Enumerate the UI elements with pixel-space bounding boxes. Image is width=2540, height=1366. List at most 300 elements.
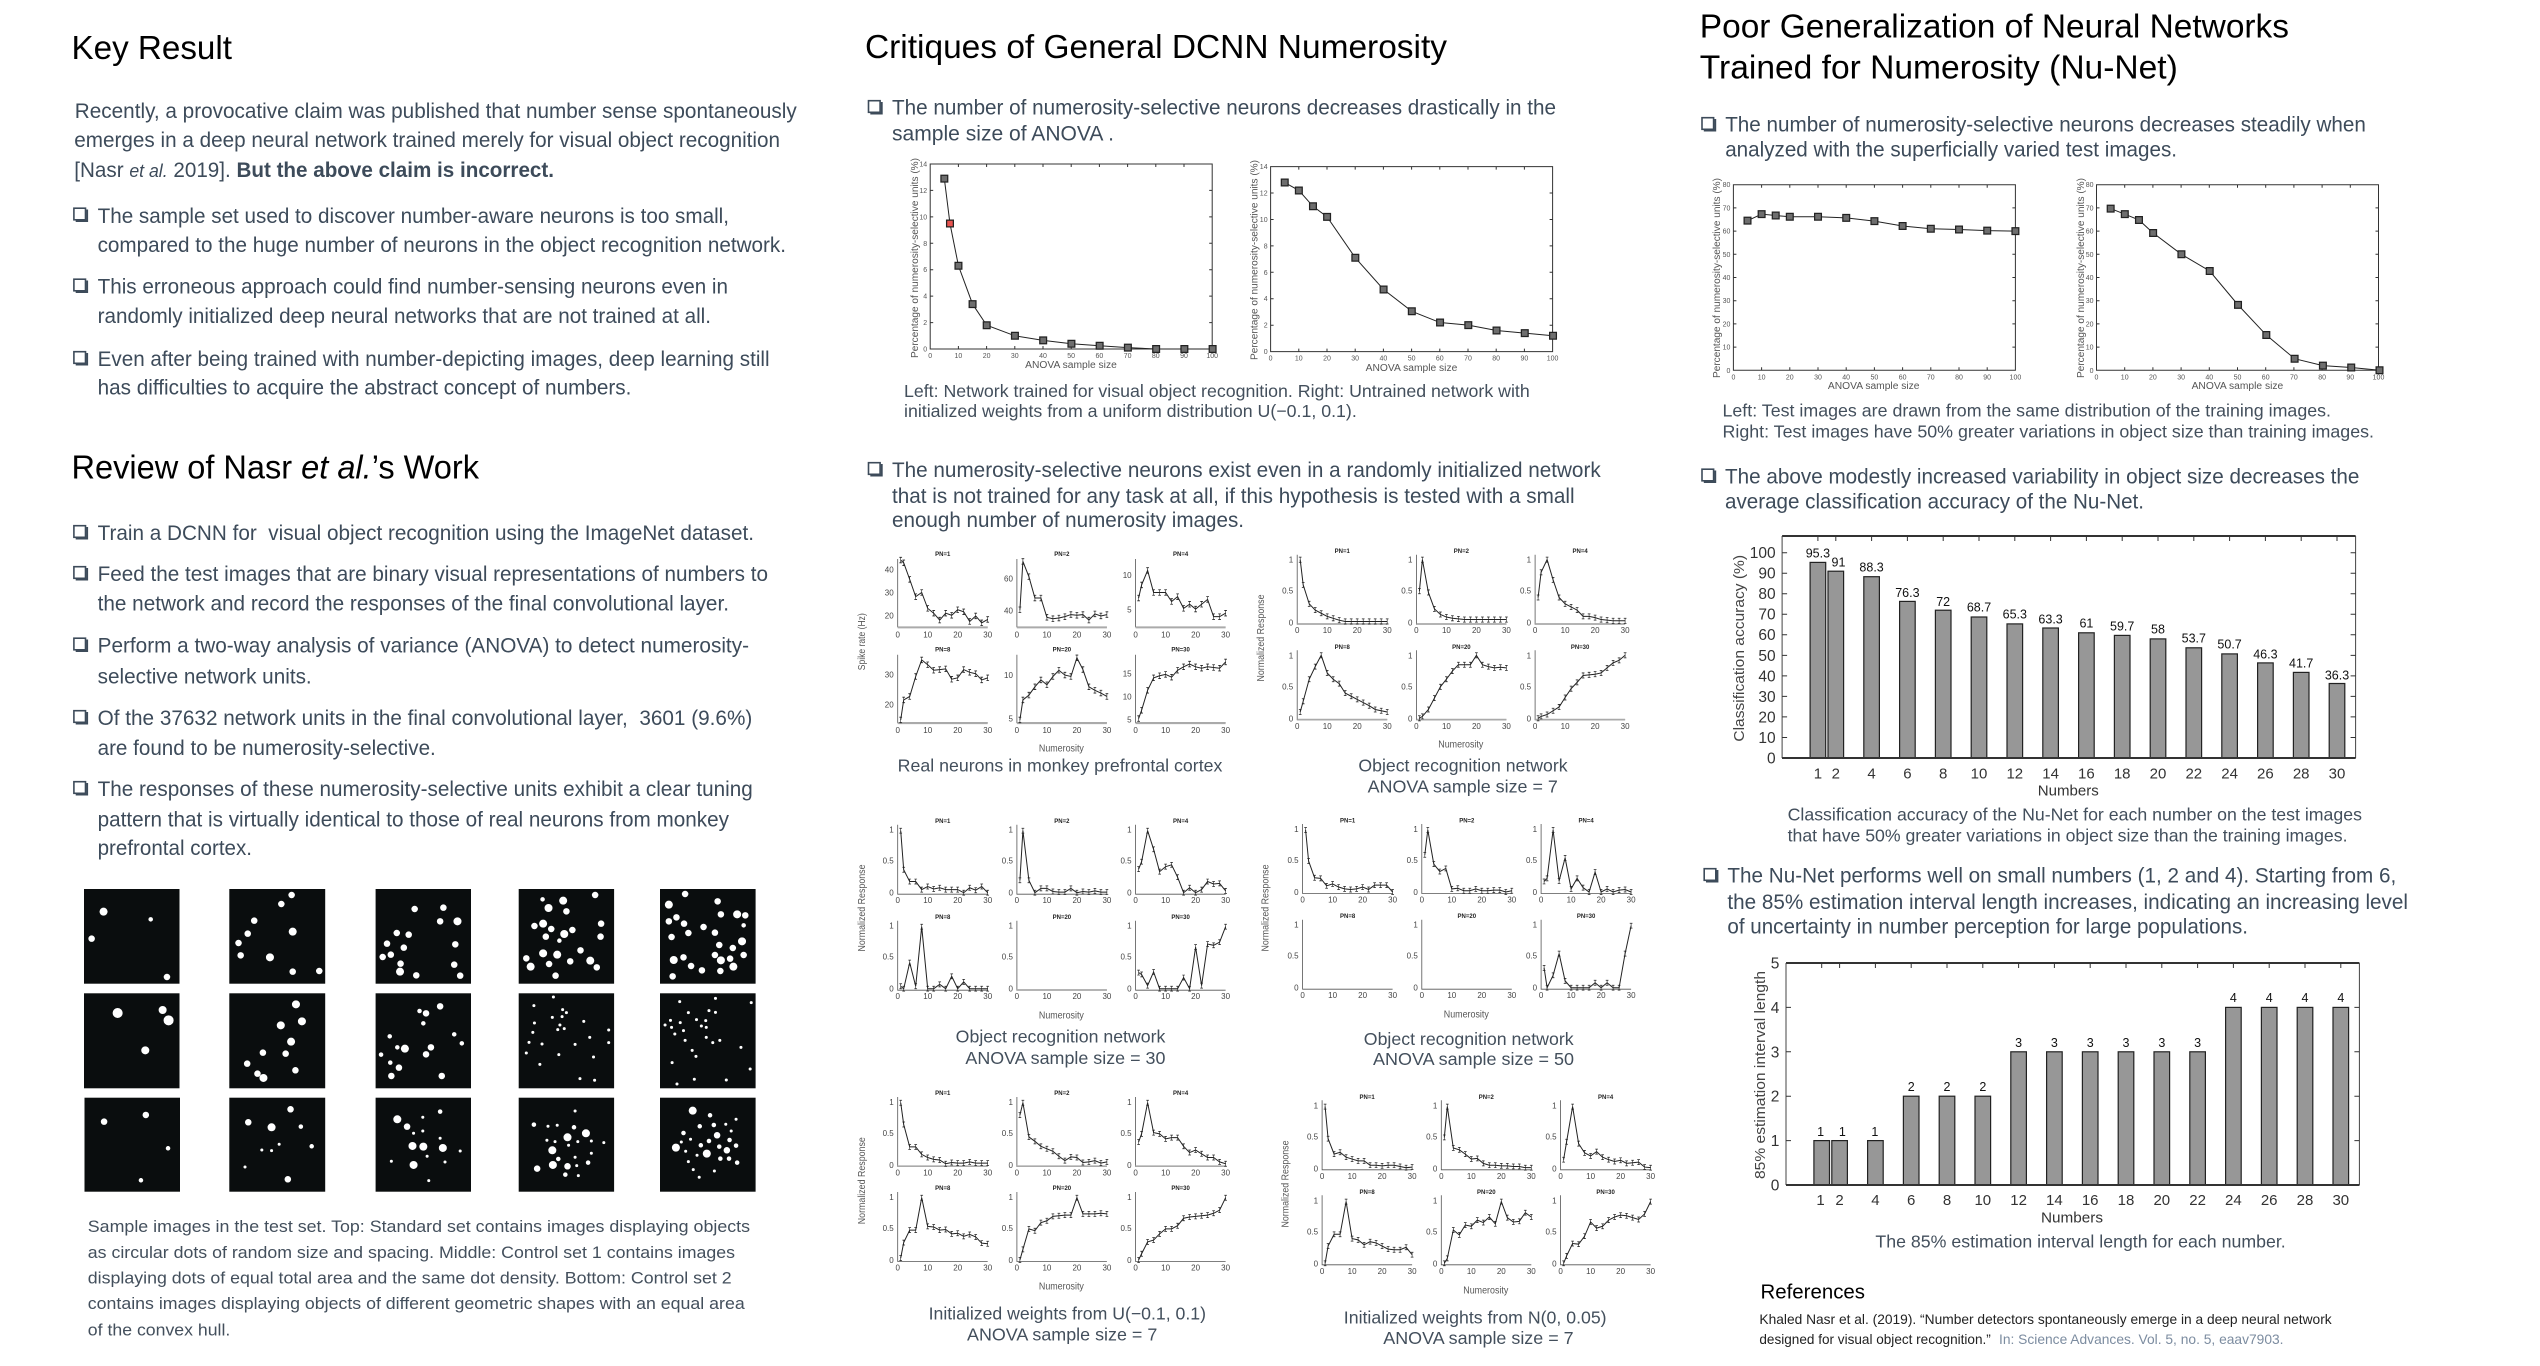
bar chart: 85% estimation interval length: 3 <box>2123 1036 2130 1050</box>
mini chart: PN=8 <box>1287 914 1398 1000</box>
bullet: network unit counts: Of the 37632 network units in the final convolutional layer, 3601 (9.6%) <box>98 707 752 730</box>
caption: Initialized weights from U(−0.1, 0.1) <box>929 1303 1206 1323</box>
mini chart: PN=30: PN=30 <box>1171 1186 1191 1192</box>
mini chart: PN=1 <box>1282 549 1392 635</box>
mini chart: PN=1 <box>885 552 993 640</box>
small multiples: initialized weights uniform <box>857 1091 1231 1344</box>
mini chart: PN=8: PN=8 <box>1340 914 1356 920</box>
mini chart: PN=4 <box>1123 552 1231 640</box>
dot image: control set 1, 3 <box>376 993 471 1088</box>
bar chart: 85% estimation interval length: 4 <box>2302 991 2309 1005</box>
small multiples: object recognition network, ANOVA 7 <box>1256 549 1630 796</box>
bar chart: classification accuracy: 8 <box>1939 765 1947 782</box>
bar chart: classification accuracy: 30 <box>2329 765 2345 782</box>
bullet: variability decreases accuracy: average classification accuracy of the Nu-Net. <box>1725 491 2144 514</box>
mini chart: PN=4: 5 <box>1127 605 1132 614</box>
y axis label: Spike rate (Hz) <box>857 613 868 670</box>
bar chart: 85% estimation interval length: 24 <box>2225 1192 2242 1209</box>
bar chart: classification accuracy: 76.3 <box>1895 586 1920 600</box>
bar chart: classification accuracy: 10 <box>1971 765 1987 782</box>
bar chart: 85% estimation interval length: 2 <box>1944 1080 1951 1094</box>
caption: sample images: displaying dots of equal total area and the same dot density. Bottom: Control set 2 <box>88 1269 732 1288</box>
mini chart: PN=20: PN=20 <box>1452 645 1471 651</box>
caption: ANOVA sample size = 50 <box>1373 1049 1574 1069</box>
bar chart: classification accuracy: 90 <box>1758 566 1776 583</box>
mini chart: PN=4: PN=4 <box>1173 552 1189 558</box>
bullet: neurons decrease with sample size <box>868 97 1556 146</box>
caption: classification accuracy <box>1788 805 2362 846</box>
bar chart: classification accuracy: 26 <box>2257 765 2274 782</box>
dot image: control set 2, 1 <box>84 1098 180 1192</box>
dot image: control set 1, 2 <box>229 993 325 1088</box>
bar chart: 85% estimation interval length: 3 <box>2158 1036 2165 1050</box>
bar chart: 85% estimation interval length: 8 <box>1943 1192 1951 1209</box>
dot image: control set 1, 1 <box>84 993 180 1088</box>
x axis label: Numerosity <box>1039 744 1084 754</box>
caption: Object recognition network <box>1364 1029 1574 1049</box>
bar chart: classification accuracy: 68.7 <box>1967 601 1991 615</box>
heading: Critiques of General DCNN Numerosity: Critiques of General DCNN Numerosity <box>865 28 1447 65</box>
caption: Object recognition network <box>956 1026 1166 1046</box>
bar chart: classification accuracy <box>1731 536 2356 800</box>
bar chart: classification accuracy: 36.3 <box>2325 668 2349 682</box>
mini chart: PN=2 <box>1004 552 1112 640</box>
mini chart: PN=8 <box>1282 645 1392 731</box>
bar chart: 85% estimation interval length: 1 <box>1871 1125 1878 1139</box>
y axis label: Normalized Response <box>857 864 868 952</box>
bullet: feed test images <box>74 563 768 616</box>
bar chart: classification accuracy: Classification accuracy (%) <box>1731 555 1748 742</box>
mini chart: PN=2: PN=2 <box>1054 552 1070 558</box>
bar chart: classification accuracy: 50 <box>1758 648 1776 665</box>
bar chart: classification accuracy: 72 <box>1936 595 1950 609</box>
bullet: network unit counts <box>74 707 752 760</box>
bar chart: classification accuracy: 41.7 <box>2289 657 2313 671</box>
bullet: difficulties acquiring concept <box>74 348 770 400</box>
bar chart: classification accuracy: 80 <box>1758 586 1776 603</box>
caption <box>1344 1307 1607 1348</box>
caption: Object recognition network <box>1358 756 1568 776</box>
bar chart: 85% estimation interval length: 1 <box>1771 1133 1779 1150</box>
bar chart: 85% estimation interval length: 85% estimation interval length <box>1752 971 1769 1179</box>
mini chart: PN=2: 60 <box>1004 574 1013 583</box>
caption: sample images <box>88 1217 750 1340</box>
line chart: varied test images: ANOVA sample size <box>2192 381 2284 392</box>
dot image: control set 2, 5 <box>660 1098 756 1192</box>
bar chart: 85% estimation interval length: 4 <box>2337 991 2344 1005</box>
mini chart: PN=1: 30 <box>885 588 894 597</box>
bar chart: classification accuracy: 16 <box>2078 765 2095 782</box>
bar chart: classification accuracy: 40 <box>1758 668 1776 685</box>
bullet: small numbers and interval length: The Nu-Net performs well on small numbers (1, 2 and 4). Starting from 6, <box>1727 865 2396 888</box>
mini chart: PN=4 <box>1120 819 1231 905</box>
mini chart: PN=20: 10 <box>1004 671 1013 680</box>
mini chart: PN=20: PN=20 <box>1053 648 1072 654</box>
y axis label: Normalized Response <box>1256 594 1267 682</box>
mini chart: PN=1 <box>883 1091 993 1178</box>
caption: Initialized weights from N(0, 0.05) <box>1344 1307 1607 1327</box>
line chart: trained network: Percentage of numerosity-selective units (%) <box>910 158 921 358</box>
bar chart: 85% estimation interval length: 3 <box>2015 1036 2022 1050</box>
caption: ANOVA sample size = 7 <box>1368 776 1558 796</box>
bar chart: 85% estimation interval length: 2 <box>1979 1080 1986 1094</box>
bar chart: classification accuracy: 95.3 <box>1806 547 1830 561</box>
mini chart: PN=8: PN=8 <box>935 915 951 921</box>
caption: left/right networks: Left: Network trained for visual object recognition. Right: Untrained network with <box>904 381 1530 401</box>
y axis label: Normalized Response <box>1260 864 1272 952</box>
bullet: small numbers and interval length: of uncertainty in number perception for large populations. <box>1727 915 2248 938</box>
bar chart: classification accuracy: 20 <box>1758 709 1776 726</box>
small multiples: real neurons in monkey prefrontal cortex <box>857 552 1231 776</box>
caption <box>1358 756 1568 796</box>
bullet: ANOVA <box>74 635 749 688</box>
line chart: varied test images: Percentage of numerosity-selective units (%) <box>2076 178 2087 378</box>
mini chart: PN=4: 10 <box>1123 571 1132 580</box>
mini chart: PN=8: 20 <box>885 701 894 710</box>
line chart: varied test images <box>2076 178 2384 392</box>
heading: Poor Generalization: Trained for Numerosity (Nu-Net) <box>1700 48 2178 85</box>
mini chart: PN=2 <box>1002 819 1112 905</box>
mini chart: PN=1 <box>1307 1095 1417 1181</box>
bullet: neurons decrease steadily: The number of numerosity-selective neurons decreases steadily when <box>1725 114 2366 137</box>
dot image: standard set 4 <box>519 889 614 984</box>
dot image: control set 2, 2 <box>229 1098 325 1192</box>
caption: test image distribution: Left: Test images are drawn from the same distribution of the training images. <box>1722 401 2331 421</box>
line chart: untrained network: Percentage of numerosity-selective units (%) <box>1250 160 1261 360</box>
mini chart: PN=4: PN=4 <box>1579 818 1594 824</box>
bar chart: 85% estimation interval length: 4 <box>1871 1192 1880 1209</box>
mini chart: PN=30: PN=30 <box>1171 648 1191 654</box>
caption: ANOVA sample size = 7 <box>967 1324 1157 1344</box>
mini chart: PN=2: PN=2 <box>1054 1091 1070 1097</box>
mini chart: PN=4: PN=4 <box>1173 819 1189 825</box>
dot image: standard set 1 <box>84 889 180 984</box>
bar chart: 85% estimation interval length: 1 <box>1817 1125 1824 1139</box>
mini chart: PN=4: PN=4 <box>1573 549 1588 555</box>
bullet: selective neurons exist in random network <box>868 459 1601 532</box>
dot image: standard set 3 <box>376 889 471 984</box>
dot image: standard set 2 <box>229 889 325 984</box>
bar chart: classification accuracy: 18 <box>2114 765 2131 782</box>
mini chart: PN=20: PN=20 <box>1053 1186 1072 1192</box>
bullet: difficulties acquiring concept: has difficulties to acquire the abstract concept of numbers. <box>98 376 631 400</box>
bullet: small numbers and interval length <box>1704 865 2408 938</box>
mini chart: PN=2: PN=2 <box>1054 819 1070 825</box>
x axis label: Numerosity <box>1039 1010 1084 1022</box>
mini chart: PN=30: 5 <box>1127 716 1132 725</box>
line chart: untrained network: ANOVA sample size <box>1366 363 1458 374</box>
mini chart: PN=1: PN=1 <box>935 552 951 558</box>
mini chart: PN=2: PN=2 <box>1454 549 1470 555</box>
caption <box>956 1026 1166 1068</box>
mini chart: PN=2: PN=2 <box>1459 818 1475 824</box>
small multiples: initialized weights normal <box>1280 1095 1656 1348</box>
heading: Poor Generalization <box>1700 7 2289 85</box>
bar chart: 85% estimation interval length: 3 <box>2194 1036 2201 1050</box>
bullet: ANOVA: selective network units. <box>98 666 312 688</box>
bar chart: classification accuracy: 58 <box>2151 623 2165 637</box>
bullet: feed test images: the network and record the responses of the final convolutional layer. <box>98 592 729 616</box>
bar chart: 85% estimation interval length: 16 <box>2082 1192 2099 1209</box>
bullet: train a DCNN: Train a DCNN for visual object recognition using the ImageNet dataset. <box>98 522 754 545</box>
bar chart: 85% estimation interval length: 2 <box>1908 1080 1915 1094</box>
bullet: erroneous approach: randomly initialized deep neural networks that are not trained at all. <box>98 305 711 328</box>
bullet: neurons decrease with sample size: sample size of ANOVA . <box>892 122 1114 146</box>
bar chart: classification accuracy: 46.3 <box>2253 648 2278 662</box>
caption: classification accuracy: Classification accuracy of the Nu-Net for each number on the test images <box>1788 805 2362 825</box>
bar chart: classification accuracy: 1 <box>1814 765 1822 782</box>
mini chart: PN=4 <box>1526 818 1636 904</box>
reference entry: designed for visual object recognition.” <box>1759 1331 1991 1347</box>
bar chart: classification accuracy: 70 <box>1758 607 1776 624</box>
mini chart: PN=30: PN=30 <box>1596 1190 1616 1196</box>
mini chart: PN=20 <box>1004 648 1112 735</box>
mini chart: PN=1 <box>883 819 993 905</box>
bar chart: 85% estimation interval length: 18 <box>2118 1192 2134 1209</box>
bar chart: classification accuracy: 30 <box>1758 689 1776 706</box>
reference entry <box>1759 1311 2333 1347</box>
bar chart: 85% estimation interval length: 22 <box>2189 1192 2206 1209</box>
bullet: sample set too small: The sample set used to discover number-aware neurons is too small, <box>98 205 729 228</box>
heading: Key Result: Key Result <box>72 29 232 66</box>
mini chart: PN=8 <box>883 1186 993 1272</box>
mini chart: PN=30: PN=30 <box>1171 915 1191 921</box>
line chart: same distribution test images: ANOVA sample size <box>1828 381 1920 392</box>
bullet: difficulties acquiring concept: Even after being trained with number-depicting images, deep learning still <box>98 348 770 371</box>
mini chart: PN=4 <box>1545 1095 1656 1181</box>
bar chart: classification accuracy: 63.3 <box>2038 613 2063 627</box>
bar chart: 85% estimation interval length: 0 <box>1771 1178 1780 1194</box>
mini chart: PN=8 <box>885 648 993 735</box>
mini chart: PN=30: PN=30 <box>1571 645 1590 651</box>
mini chart: PN=20: PN=20 <box>1458 914 1477 920</box>
bullet: network unit counts: are found to be numerosity-selective. <box>98 737 436 760</box>
bar chart: classification accuracy: Numbers <box>2038 783 2099 800</box>
mini chart: PN=8: 30 <box>885 670 894 679</box>
bar chart: classification accuracy: 61 <box>2079 617 2093 631</box>
caption: Real neurons in monkey prefrontal cortex <box>898 756 1223 776</box>
mini chart: PN=20 <box>1407 914 1517 1000</box>
bar chart: classification accuracy: 20 <box>2150 765 2166 782</box>
caption: sample images: Sample images in the test set. Top: Standard set contains images displaying objects <box>88 1217 750 1236</box>
dot image: control set 1, 4 <box>519 993 614 1088</box>
caption <box>929 1303 1206 1344</box>
bar chart: 85% estimation interval length: 10 <box>1974 1192 1991 1209</box>
bullet: ANOVA: Perform a two-way analysis of variance (ANOVA) to detect numerosity- <box>98 635 749 658</box>
mini chart: PN=8: PN=8 <box>1335 645 1350 651</box>
bar chart: 85% estimation interval length <box>1752 956 2359 1227</box>
mini chart: PN=30 <box>1120 915 1231 1001</box>
bar chart: 85% estimation interval length: 26 <box>2261 1192 2278 1209</box>
mini chart: PN=20 <box>1002 1186 1112 1272</box>
mini chart: PN=20 <box>1401 645 1511 731</box>
x axis label: Numerosity <box>1444 1010 1489 1020</box>
bar chart: 85% estimation interval length: 2 <box>1771 1089 1779 1106</box>
bar chart: classification accuracy: 14 <box>2042 765 2059 782</box>
bar chart: classification accuracy: 88.3 <box>1859 561 1884 575</box>
y axis label: Normalized Response <box>1280 1140 1292 1228</box>
mini chart: PN=1: PN=1 <box>1340 818 1356 824</box>
bar chart: 85% estimation interval length: 1 <box>1816 1192 1825 1209</box>
mini chart: PN=30 <box>1526 914 1636 1000</box>
mini chart: PN=1: 20 <box>885 611 894 620</box>
mini chart: PN=30: 15 <box>1123 670 1132 679</box>
bar chart: classification accuracy: 6 <box>1903 765 1912 782</box>
line chart: trained network: ANOVA sample size <box>1025 360 1117 371</box>
mini chart: PN=2: PN=2 <box>1479 1095 1495 1101</box>
caption: sample images: of the convex hull. <box>88 1321 230 1340</box>
line chart: same distribution test images <box>1712 178 2021 392</box>
mini chart: PN=1: 40 <box>885 565 894 574</box>
mini chart: PN=2 <box>1426 1095 1536 1181</box>
bar chart: classification accuracy: 2 <box>1832 765 1840 782</box>
mini chart: PN=8 <box>883 915 993 1001</box>
mini chart: PN=2 <box>1002 1091 1112 1178</box>
mini chart: PN=4: PN=4 <box>1598 1095 1614 1101</box>
mini chart: PN=4 <box>1120 1091 1231 1178</box>
image grid: sample dot images <box>84 889 756 1192</box>
bar chart: 85% estimation interval length: 5 <box>1771 956 1779 972</box>
bar chart: 85% estimation interval length: 30 <box>2332 1192 2349 1209</box>
mini chart: PN=30 <box>1123 648 1231 735</box>
bullet: tuning pattern: pattern that is virtually identical to those of real neurons from monkey <box>98 809 729 832</box>
mini chart: PN=8 <box>1307 1190 1417 1276</box>
mini chart: PN=30: PN=30 <box>1577 914 1596 920</box>
caption: test image distribution <box>1722 401 2374 441</box>
mini chart: PN=2 <box>1401 549 1511 635</box>
mini chart: PN=8: PN=8 <box>1360 1190 1375 1196</box>
mini chart: PN=2 <box>1407 818 1517 904</box>
dot image: control set 2, 3 <box>376 1098 471 1192</box>
mini chart: PN=30 <box>1545 1190 1656 1276</box>
mini chart: PN=30 <box>1520 645 1630 731</box>
bar chart: 85% estimation interval length: Numbers <box>2041 1210 2103 1227</box>
bar chart: classification accuracy: 53.7 <box>2182 632 2206 646</box>
line chart: untrained network <box>1250 160 1559 374</box>
x axis label: Numerosity <box>1463 1286 1508 1296</box>
text block: key result intro: [Nasr et al. 2019]. But the above claim is incorrect. <box>74 159 554 182</box>
caption: sample images: contains images displaying objects of different geometric shapes with an equal area <box>88 1294 745 1313</box>
line chart: same distribution test images: Percentage of numerosity-selective units (%) <box>1712 178 1723 378</box>
heading: Review of Nasr et al.'s Work: Review of Nasr et al.’s Work <box>72 449 479 486</box>
bullet: erroneous approach: This erroneous approach could find number-sensing neurons even in <box>98 276 728 298</box>
caption: ANOVA sample size = 30 <box>965 1048 1166 1068</box>
mini chart: PN=30 <box>1120 1186 1231 1272</box>
bar chart: 85% estimation interval length: 4 <box>2230 991 2237 1005</box>
bullet: tuning pattern <box>74 778 753 860</box>
small multiples: object recognition network, ANOVA 50 <box>1260 818 1636 1069</box>
bullet: tuning pattern: The responses of these numerosity-selective units exhibit a clear tuning <box>98 778 753 801</box>
mini chart: PN=20: PN=20 <box>1477 1190 1496 1196</box>
text block: key result intro: Recently, a provocative claim was published that number sense spontaneously <box>75 100 797 123</box>
mini chart: PN=1: PN=1 <box>1335 549 1350 555</box>
y axis label: Normalized Response <box>857 1137 868 1224</box>
bar chart: classification accuracy: 59.7 <box>2110 620 2134 634</box>
bar chart: 85% estimation interval length: 3 <box>2087 1036 2094 1050</box>
bar chart: classification accuracy: 10 <box>1758 730 1776 747</box>
bullet: selective neurons exist in random network: The numerosity-selective neurons exist even in a randomly initialized network <box>892 459 1601 482</box>
mini chart: PN=20 <box>1002 915 1112 1001</box>
bar chart: 85% estimation interval length: 6 <box>1907 1192 1915 1209</box>
bar chart: classification accuracy: 22 <box>2185 765 2202 782</box>
mini chart: PN=2: 40 <box>1004 606 1013 615</box>
bullet: neurons decrease with sample size: The number of numerosity-selective neurons decreases drastically in the <box>892 97 1556 120</box>
mini chart: PN=1 <box>1287 818 1398 904</box>
bullet: sample set too small: compared to the huge number of neurons in the object recognition network. <box>98 234 786 257</box>
bullet: erroneous approach <box>74 276 728 328</box>
text block: key result intro: emerges in a deep neural network trained merely for visual object recognition <box>74 129 780 152</box>
caption: ANOVA sample size = 7 <box>1383 1328 1574 1348</box>
references heading: References <box>1760 1280 1865 1303</box>
x axis label: Numerosity <box>1039 1282 1084 1292</box>
mini chart: PN=8: PN=8 <box>935 648 951 654</box>
bar chart: classification accuracy: 50.7 <box>2217 638 2242 652</box>
bar chart: 85% estimation interval length: 20 <box>2153 1192 2170 1209</box>
bar chart: classification accuracy: 28 <box>2293 765 2310 782</box>
mini chart: PN=4: PN=4 <box>1173 1091 1189 1097</box>
bar chart: classification accuracy: 60 <box>1758 627 1776 644</box>
dot image: standard set 5 <box>660 889 756 984</box>
bar chart: 85% estimation interval length: 3 <box>2051 1036 2058 1050</box>
bar chart: 85% estimation interval length: 14 <box>2046 1192 2063 1209</box>
dot image: control set 1, 5 <box>660 993 756 1088</box>
bullet: small numbers and interval length: the 85% estimation interval length increases, indicating an increasing level <box>1727 891 2408 914</box>
bar chart: classification accuracy: 24 <box>2221 765 2238 782</box>
reference entry: Khaled Nasr et al. (2019). “Number detectors spontaneously emerge in a deep neural network <box>1759 1311 2333 1327</box>
bullet: selective neurons exist in random network: enough number of numerosity images. <box>892 509 1244 532</box>
bar chart: classification accuracy: 100 <box>1750 545 1776 562</box>
caption: test image distribution: Right: Test images have 50% greater variations in object size than training images. <box>1722 421 2374 441</box>
mini chart: PN=1: PN=1 <box>1360 1095 1375 1101</box>
bar chart: 85% estimation interval length: 12 <box>2010 1192 2027 1209</box>
mini chart: PN=20: PN=20 <box>1053 915 1072 921</box>
caption: left/right networks <box>904 381 1530 421</box>
bullet: variability decreases accuracy: The above modestly increased variability in object size decreases the <box>1725 465 2359 488</box>
dot image: control set 2, 4 <box>519 1098 614 1192</box>
bar chart: 85% estimation interval length: 1 <box>1839 1125 1846 1139</box>
caption: estimation interval: The 85% estimation interval length for each number. <box>1875 1232 2286 1252</box>
text block: key result intro <box>74 100 797 182</box>
bar chart: 85% estimation interval length: 2 <box>1835 1192 1844 1209</box>
x axis label: Numerosity <box>1438 740 1483 750</box>
bar chart: 85% estimation interval length: 28 <box>2297 1192 2313 1209</box>
mini chart: PN=1: PN=1 <box>935 819 951 825</box>
bar chart: classification accuracy: 4 <box>1867 765 1876 782</box>
mini chart: PN=4 <box>1520 549 1630 635</box>
bar chart: classification accuracy: 0 <box>1767 750 1776 767</box>
caption: classification accuracy: that have 50% greater variations in object size than the training images. <box>1788 826 2348 846</box>
mini chart: PN=20 <box>1426 1190 1536 1276</box>
bar chart: 85% estimation interval length: 4 <box>2266 991 2273 1005</box>
heading: Poor Generalization: Poor Generalization of Neural Networks <box>1700 7 2289 44</box>
mini chart: PN=20: 5 <box>1008 714 1013 723</box>
line chart: trained network <box>910 158 1218 371</box>
bullet: selective neurons exist in random network: that is not trained for any task at all, if this hypothesis is tested with a small <box>892 485 1575 508</box>
bullet: neurons decrease steadily: analyzed with the superficially varied test images. <box>1725 139 2177 162</box>
bar chart: classification accuracy: 65.3 <box>2003 608 2027 622</box>
bar chart: 85% estimation interval length: 4 <box>1771 1000 1780 1017</box>
bullet: sample set too small <box>74 205 786 257</box>
bullet: variability decreases accuracy <box>1702 465 2359 514</box>
bar chart: 85% estimation interval length: 3 <box>1771 1044 1779 1061</box>
mini chart: PN=8: PN=8 <box>935 1186 951 1192</box>
caption <box>1364 1029 1574 1069</box>
caption: sample images: as circular dots of random size and spacing. Middle: Control set 1 contains images <box>88 1243 735 1262</box>
caption: left/right networks: initialized weights from a uniform distribution U(−0.1, 0.1). <box>904 401 1357 421</box>
mini chart: PN=1: PN=1 <box>935 1091 951 1097</box>
mini chart: PN=30: 10 <box>1123 693 1132 702</box>
bullet: tuning pattern: prefrontal cortex. <box>98 837 252 860</box>
